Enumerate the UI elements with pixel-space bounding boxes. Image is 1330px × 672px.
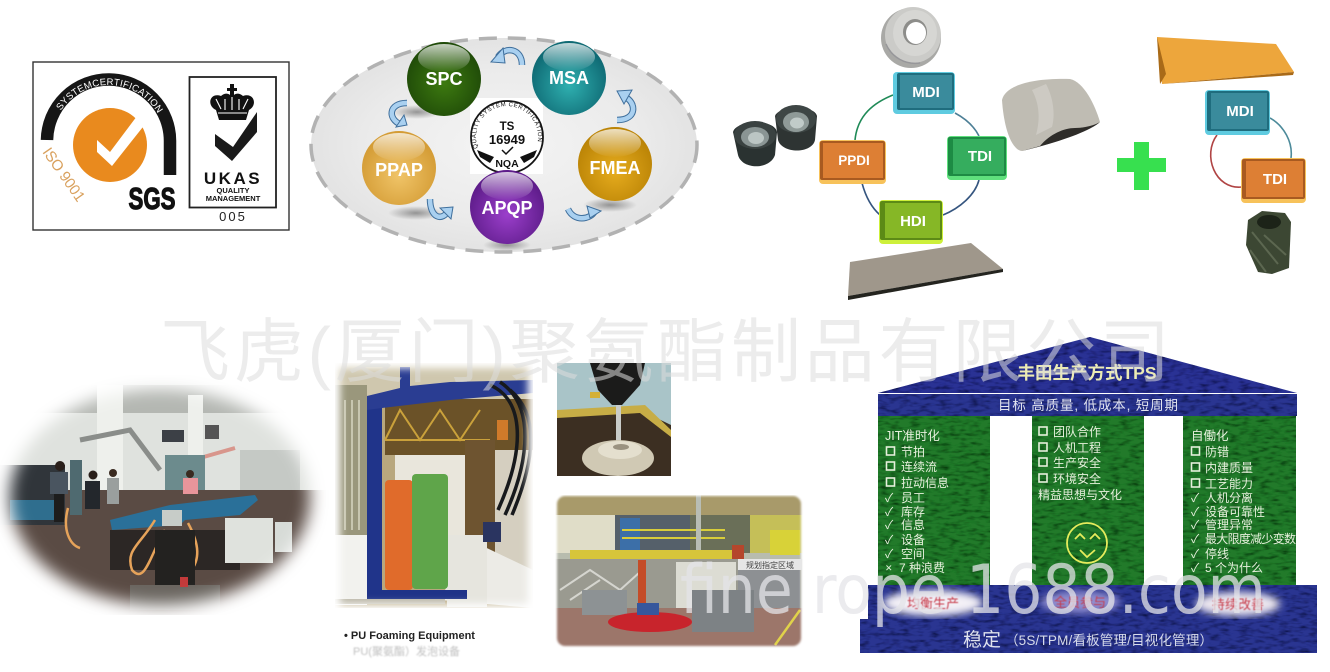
watermark: website: fine rope 1688.com xyxy=(680,551,1266,630)
isocyanate material diagram xyxy=(733,7,1100,300)
orange check circle xyxy=(73,108,150,182)
arrow: SPC to PPAP xyxy=(392,103,407,127)
TS 16949 badge: QUALITY SYSTEM CERTIFICATION xyxy=(472,102,542,148)
black certification arch xyxy=(47,79,170,175)
pillar: jidoka: ✓ xyxy=(1191,491,1200,505)
pillar: jidoka: ✓ xyxy=(1191,505,1200,519)
caption: PU foaming equipment: • PU Foaming Equipment xyxy=(344,630,475,642)
pillar: people and culture: 精益思想与文化 xyxy=(1038,487,1122,502)
sphere: MSA: MSA xyxy=(549,68,589,88)
sphere: PPAP: PPAP xyxy=(375,160,423,180)
pillar: jidoka: 5 个为什么 xyxy=(1205,561,1263,575)
pillar: JIT: ✕ xyxy=(885,563,893,573)
quality tools ellipse panel xyxy=(309,36,699,254)
pillar: JIT: ✓ xyxy=(885,491,894,505)
product: dark helical rotor xyxy=(1246,211,1291,274)
stability band xyxy=(860,619,1317,653)
icon: green plus xyxy=(1117,142,1166,190)
UKAS mark xyxy=(190,77,276,208)
product: grey board xyxy=(848,243,1003,300)
sphere: APQP xyxy=(470,170,544,244)
goal band xyxy=(878,394,1297,416)
tag: HDI: HDI xyxy=(900,213,926,230)
product: foam cushion xyxy=(1002,79,1100,151)
pillar: jidoka: 管理异常 xyxy=(1205,517,1253,532)
UKAS label: UKAS xyxy=(204,169,262,188)
sphere: SPC xyxy=(407,42,481,116)
foundation band: 持续改善 xyxy=(1212,597,1264,612)
pillar: JIT: 设备 xyxy=(901,533,925,547)
caption: PU foaming equipment xyxy=(344,630,475,658)
caption: Chinese subtitle: PU(聚氨酯）发泡设备 xyxy=(353,644,460,658)
certificate panel: SGS ISO 9001 and UKAS xyxy=(32,61,290,231)
TPS house diagram xyxy=(860,337,1317,653)
connector ring xyxy=(855,95,979,215)
photo: foam pouring nozzle xyxy=(557,363,671,476)
SGS logo text: SGS xyxy=(128,181,176,216)
watermark: company name: 飞虎(厦门)聚氨酯制品有限公司 xyxy=(160,313,1170,391)
pillar: people and culture: 人机工程 xyxy=(1053,440,1101,455)
roof xyxy=(878,337,1297,393)
icon: smiley xyxy=(1067,523,1107,563)
pillar: people and culture: 生产安全 xyxy=(1053,455,1101,470)
pillar: JIT: ✓ xyxy=(885,547,894,561)
product: black bushings xyxy=(733,105,817,166)
stability band: （5S/TPM/看板管理/目视化管理） xyxy=(1005,633,1213,648)
tag: MDI second xyxy=(1205,90,1270,135)
pillar: JIT: 拉动信息 xyxy=(901,475,949,490)
pillar: jidoka: 人机分离 xyxy=(1205,490,1253,505)
pillar: jidoka: ✓ xyxy=(1191,547,1200,561)
photo: oval factory floor xyxy=(0,375,330,615)
TS 16949 badge: 16949 xyxy=(489,132,525,147)
factory workers xyxy=(50,461,198,522)
tag: TDI xyxy=(947,136,1007,180)
tag: TDI: TDI xyxy=(968,148,992,165)
sphere: FMEA xyxy=(578,127,652,201)
tag: PPDI xyxy=(819,140,886,184)
ISO 9001 label: ISO 9001 xyxy=(39,145,88,205)
certificate number: 005 xyxy=(219,209,247,224)
roof title: 丰田生产方式TPS xyxy=(1017,363,1157,383)
pillar: JIT: 空间 xyxy=(901,547,925,561)
TS 16949 badge: NQA xyxy=(495,158,519,170)
pillar: JIT: 员工 xyxy=(901,491,925,505)
sphere shadows xyxy=(388,105,637,251)
sphere: PPAP xyxy=(362,131,436,205)
pillar: JIT: ✓ xyxy=(885,533,894,547)
pillar: jidoka: 设备可靠性 xyxy=(1205,505,1265,519)
tag: MDI: MDI xyxy=(912,84,940,101)
pillar: JIT xyxy=(878,416,990,586)
foundation band: 均衡生产 xyxy=(907,596,959,611)
pillar: jidoka: ✓ xyxy=(1191,532,1200,546)
pillar: JIT: 7 种浪费 xyxy=(899,560,945,575)
tag: TDI second: TDI xyxy=(1263,171,1287,188)
photo: production hall xyxy=(555,495,805,650)
tag: PPDI: PPDI xyxy=(838,153,870,168)
pillar: jidoka: 防错 xyxy=(1205,444,1229,459)
pillar: JIT: JIT准时化 xyxy=(885,429,940,443)
foundation band xyxy=(868,585,1317,619)
pillar: jidoka: 停线 xyxy=(1205,546,1229,561)
tag: TDI second xyxy=(1241,158,1306,203)
sign: zone label: 规划指定区域 xyxy=(746,560,794,570)
tag: MDI xyxy=(893,72,955,114)
pillar: JIT: ✓ xyxy=(885,518,894,532)
pillar: people and culture xyxy=(1032,416,1144,586)
photo: PU foaming equipment xyxy=(335,363,533,608)
pillar: jidoka: 内建质量 xyxy=(1205,461,1253,475)
pillar: JIT: 信息 xyxy=(901,517,925,532)
quality management label: QUALITY xyxy=(217,186,249,195)
pillar: JIT: 连续流 xyxy=(901,459,937,474)
connector curves xyxy=(1211,118,1291,187)
foundation band: 全员参与 xyxy=(1054,595,1106,610)
TS 16949 badge: TS xyxy=(500,121,515,133)
arrow: FMEA to MSA xyxy=(617,90,633,120)
pillar: jidoka xyxy=(1183,416,1296,586)
tag: MDI second: MDI xyxy=(1226,103,1254,120)
tag: HDI xyxy=(879,200,943,244)
stability band: 稳定 xyxy=(963,629,1001,651)
sign: zone label xyxy=(738,559,802,570)
pillar: people and culture: 环境安全 xyxy=(1053,471,1101,486)
goal text: 目标 高质量, 低成本, 短周期 xyxy=(998,397,1178,413)
TS 16949 badge xyxy=(470,98,544,174)
product: tire ring xyxy=(881,7,941,68)
sphere: APQP: APQP xyxy=(481,198,533,218)
management label: MANAGEMENT xyxy=(206,194,261,203)
UKAS tick xyxy=(215,112,257,161)
pillar: jidoka: ✓ xyxy=(1191,561,1200,575)
arch text: SYSTEMCERTIFICATION xyxy=(56,78,163,113)
arrow: MSA to SPC xyxy=(491,48,522,65)
pillar: jidoka: ✓ xyxy=(1191,518,1200,532)
product: orange slab xyxy=(1157,37,1294,84)
arrow: APQP to FMEA xyxy=(568,206,601,218)
MDI plus TDI system diagram xyxy=(1157,37,1306,274)
pillar: jidoka: 最大限度减少变数 xyxy=(1205,531,1296,546)
sphere: MSA xyxy=(532,41,606,115)
arrow: PPAP to APQP xyxy=(430,199,453,219)
sphere: SPC: SPC xyxy=(425,69,463,89)
pillar: JIT: ✓ xyxy=(885,505,894,519)
pillar: JIT: 节拍 xyxy=(901,444,925,459)
pillar: jidoka: 自働化 xyxy=(1191,429,1229,443)
sphere: FMEA: FMEA xyxy=(590,158,640,178)
pillar: people and culture: 团队合作 xyxy=(1053,424,1101,439)
pillar: JIT: 库存 xyxy=(901,504,925,519)
pillar: jidoka: 工艺能力 xyxy=(1205,477,1253,491)
crown icon xyxy=(210,84,254,120)
